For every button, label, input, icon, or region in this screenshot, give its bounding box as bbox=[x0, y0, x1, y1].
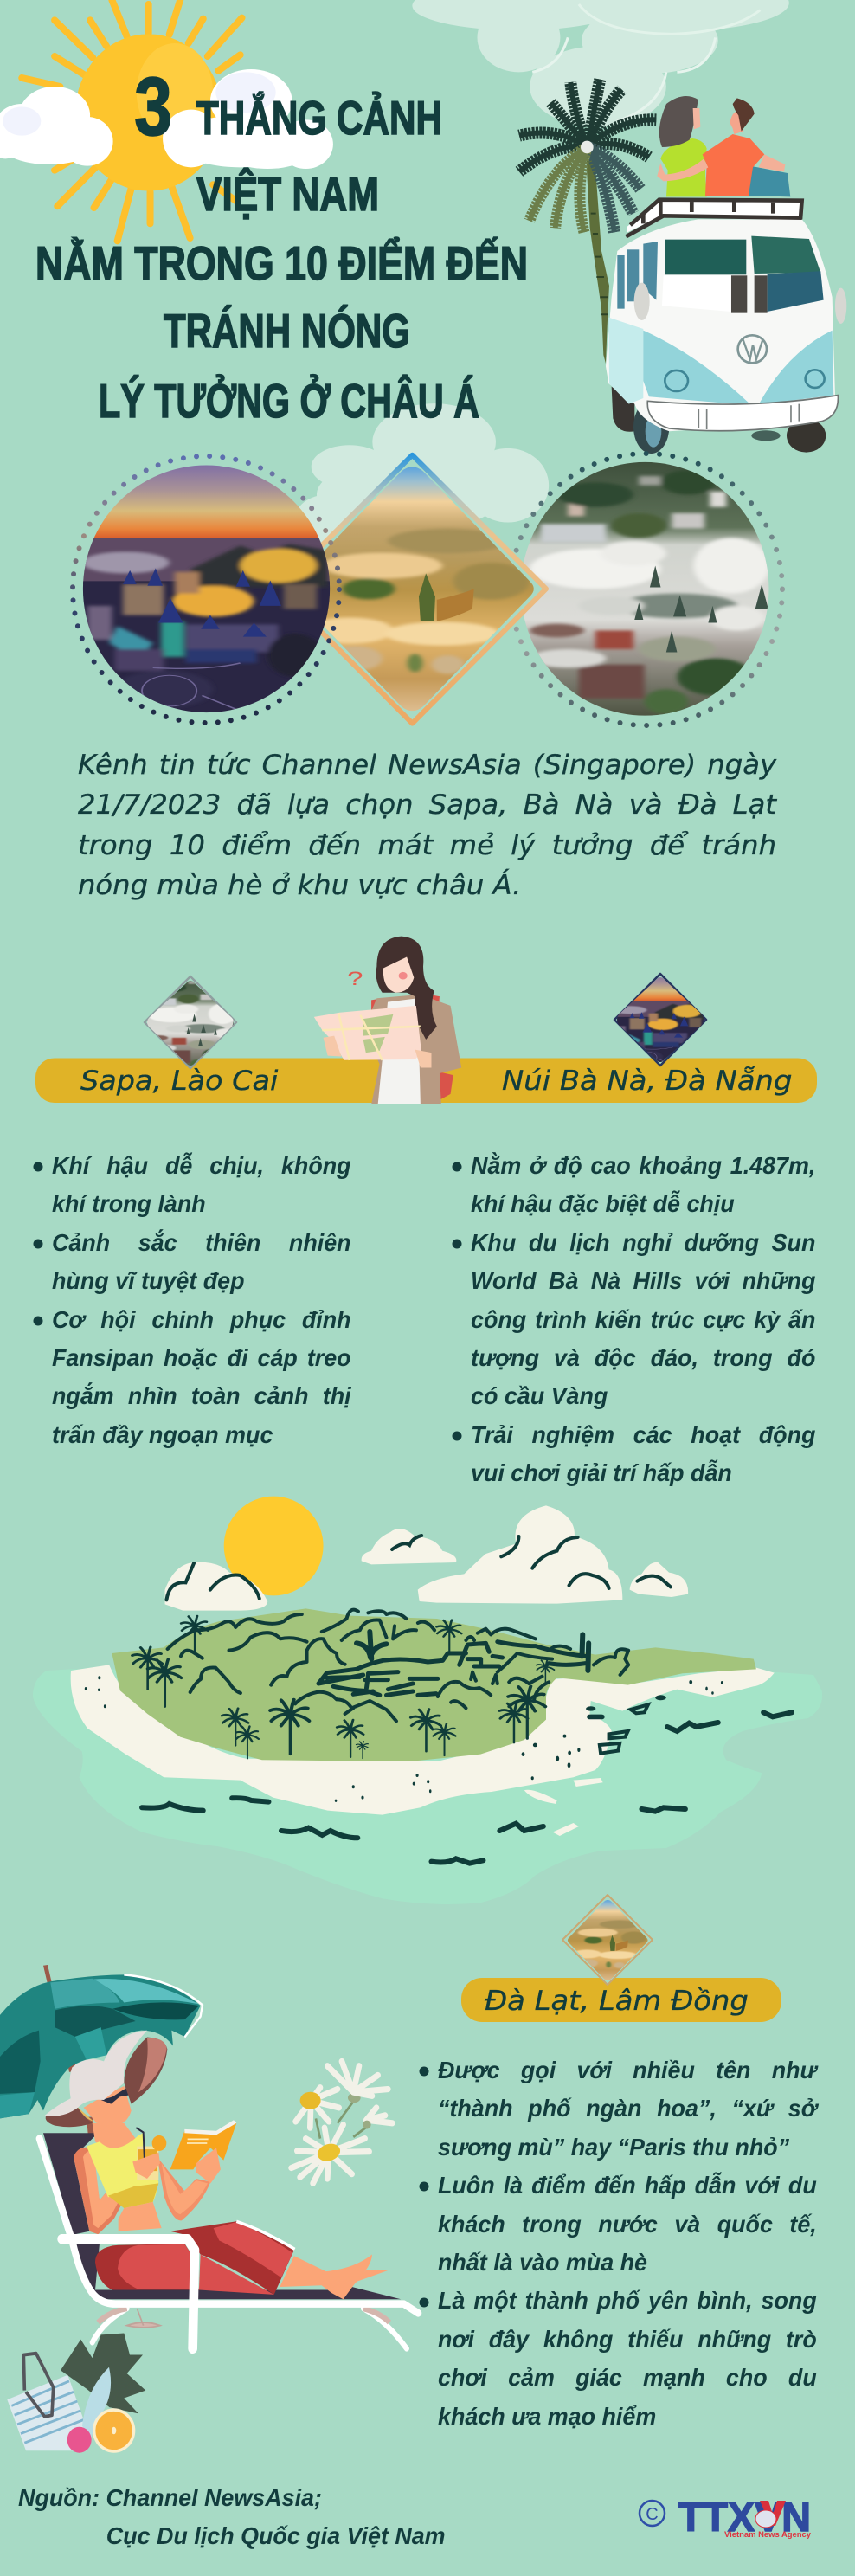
water bbox=[33, 1669, 822, 1904]
ring of dots: Ba Na bbox=[73, 456, 339, 723]
icon: sun with rays bbox=[22, 0, 242, 241]
pink flower bbox=[68, 2427, 92, 2453]
bullets: Sapa bbox=[52, 1152, 351, 1448]
source note bbox=[18, 2484, 446, 2549]
title: VIỆT NAM bbox=[196, 167, 379, 221]
heading: Ba Na: Núi Bà Nà, Đà Nẵng bbox=[502, 1066, 792, 1097]
hands bbox=[324, 1036, 431, 1067]
bullets: Da Lat bbox=[438, 2057, 819, 2430]
van wheels bbox=[612, 387, 826, 454]
map bbox=[314, 1006, 421, 1060]
bullets: Sapa: trấn đầy ngoạn mục bbox=[52, 1421, 273, 1448]
diamond frame bbox=[279, 455, 546, 724]
bullets: Sapa: Cảnh sắc thiên nhiên bbox=[52, 1229, 351, 1256]
body and limbs bbox=[74, 2123, 389, 2299]
heading: Sapa: Sapa, Lào Cai bbox=[80, 1066, 278, 1097]
lounger seat bbox=[43, 2133, 401, 2299]
ring of dots: Sapa bbox=[511, 454, 782, 725]
umbrella pole bbox=[43, 1965, 94, 2134]
tropical leaf bbox=[61, 2334, 145, 2413]
couple bbox=[657, 96, 790, 196]
bullets: Ba Na: Khu du lịch nghỉ dưỡng Sun bbox=[471, 1229, 815, 1256]
mini diamond: Sapa bbox=[144, 975, 239, 1070]
photo: Sapa bbox=[518, 460, 775, 717]
bullets: Ba Na: Trải nghiệm các hoạt động bbox=[471, 1421, 815, 1448]
illustration: island bbox=[33, 1497, 822, 1904]
bullets bbox=[33, 1162, 462, 2308]
bullets: Da Lat: Được gọi với nhiều tên như bbox=[438, 2057, 817, 2083]
logo: TTXVN: C bbox=[646, 2505, 659, 2524]
intro text: trong 10 điểm đến mát mẻ lý tưởng để tránh bbox=[78, 830, 776, 861]
mini diamond: Da Lat bbox=[562, 1895, 652, 1985]
source note: Cục Du lịch Quốc gia Việt Nam bbox=[106, 2522, 446, 2549]
title bbox=[35, 61, 528, 428]
bullets: Ba Na: có cầu Vàng bbox=[471, 1382, 608, 1409]
van body bbox=[606, 219, 838, 431]
jacket bbox=[363, 995, 461, 1104]
lounger legs bbox=[93, 2309, 407, 2348]
intro text bbox=[78, 750, 777, 901]
label band: Sapa and Ba Na bbox=[35, 1058, 817, 1103]
waves bbox=[142, 1712, 792, 1864]
sun bbox=[224, 1497, 324, 1595]
flowers bbox=[292, 2061, 392, 2183]
pale cloud: top right bbox=[412, 0, 789, 127]
bullets: Sapa: hùng vĩ tuyệt đẹp bbox=[52, 1267, 245, 1294]
green hill bbox=[112, 1608, 756, 1761]
illustration: woman reading on sun lounger bbox=[0, 1965, 418, 2453]
bullets: Ba Na: tượng và độc đáo, trong đó bbox=[471, 1344, 815, 1371]
hair bbox=[376, 937, 437, 1040]
source note: Nguồn: Channel NewsAsia; bbox=[18, 2484, 322, 2511]
bullets: Sapa: khí trong lành bbox=[52, 1190, 206, 1217]
intro text: Kênh tin tức Channel NewsAsia (Singapore) ngày bbox=[78, 750, 776, 781]
bullets: Da Lat: sương mù” hay “Paris thu nhỏ” bbox=[438, 2134, 789, 2161]
bullets: Sapa: ngắm nhìn toàn cảnh thị bbox=[52, 1382, 351, 1409]
photo: Ba Na bbox=[76, 464, 338, 714]
logo: TTXVN: TTXVN bbox=[678, 2494, 811, 2540]
mini diamond: Ba Na bbox=[613, 974, 710, 1066]
umbrella bbox=[0, 1974, 202, 2118]
surfboard bbox=[82, 2367, 111, 2438]
van bumper bbox=[647, 396, 838, 431]
backpack straps and bag bbox=[421, 1067, 453, 1104]
book bbox=[170, 2120, 236, 2183]
intro text: nóng mùa hè ở khu vực châu Á. bbox=[78, 870, 521, 901]
logo: TTXVN: Vietnam News Agency bbox=[724, 2530, 812, 2540]
bullets: Ba Na: công trình kiến trúc cực kỳ ấn bbox=[471, 1306, 815, 1333]
palm tree bbox=[519, 80, 656, 364]
illustration: couple on camper van bbox=[606, 96, 846, 454]
bullets: Sapa: Cơ hội chinh phục đỉnh bbox=[52, 1306, 351, 1333]
bullets: Da Lat: nhất là vào mùa hè bbox=[438, 2249, 647, 2276]
label band: Da Lat bbox=[461, 1978, 781, 2022]
title: THẮNG CẢNH bbox=[196, 91, 442, 145]
pale cloud behind photos bbox=[295, 403, 549, 544]
heading: Da Lat: Đà Lạt, Lâm Đồng bbox=[485, 1986, 749, 2017]
title: NẰM TRONG 10 ĐIỂM ĐẾN bbox=[35, 236, 528, 290]
lounger frame bbox=[40, 2139, 418, 2313]
stones and dots bbox=[85, 1676, 723, 1802]
bullets: Da Lat: Là một thành phố yên bình, song bbox=[438, 2287, 817, 2314]
shirt bbox=[378, 998, 421, 1104]
clouds over sun bbox=[0, 69, 333, 169]
sand bbox=[71, 1665, 775, 1815]
red trousers bbox=[95, 2221, 295, 2295]
photo: Da Lat bbox=[284, 464, 546, 717]
hat and face bbox=[45, 2031, 167, 2127]
bullets: Sapa: Khí hậu dễ chịu, không bbox=[52, 1152, 351, 1179]
bullets: Ba Na: World Bà Nà Hills với những bbox=[471, 1267, 815, 1294]
face bbox=[383, 957, 414, 993]
bullets: Da Lat: nơi đây không thiếu những trò bbox=[438, 2326, 817, 2353]
bullets: Da Lat: khách ưa mạo hiểm bbox=[438, 2403, 656, 2430]
bullets: Da Lat: khách trong nước và quốc tế, bbox=[438, 2211, 817, 2238]
bullets: Da Lat: Luôn là điểm đến hấp dẫn với du bbox=[438, 2172, 817, 2199]
drink bbox=[132, 2128, 166, 2180]
VW logo and headlights bbox=[665, 335, 825, 391]
intro text: 21/7/2023 đã lựa chọn Sapa, Bà Nà và Đà Lạt bbox=[78, 789, 776, 821]
bullets: Ba Na: Nằm ở độ cao khoảng 1.487m, bbox=[471, 1152, 815, 1179]
island vegetation bbox=[132, 1610, 628, 1759]
orange slice bbox=[93, 2408, 135, 2453]
bullets: Da Lat: “thành phố ngàn hoa”, “xứ sở bbox=[438, 2095, 817, 2122]
bullets: Ba Na bbox=[471, 1152, 815, 1486]
question mark: ? bbox=[347, 968, 363, 989]
bullets: Sapa: Fansipan hoặc đi cáp treo bbox=[52, 1344, 351, 1371]
title: 3 bbox=[134, 61, 172, 153]
title: LÝ TƯỞNG Ở CHÂU Á bbox=[99, 374, 479, 428]
illustration: girl with map bbox=[314, 937, 461, 1104]
clouds bbox=[165, 1505, 688, 1611]
bullets: Ba Na: khí hậu đặc biệt dễ chịu bbox=[471, 1190, 735, 1217]
bullets: Da Lat: chơi cảm giác mạnh cho du bbox=[438, 2364, 817, 2391]
van windows bbox=[617, 236, 846, 324]
roof rack bbox=[626, 200, 802, 236]
beach bag bbox=[7, 2354, 87, 2450]
title: TRÁNH NÓNG bbox=[164, 304, 410, 357]
bullets: Ba Na: vui chơi giải trí hấp dẫn bbox=[471, 1459, 732, 1486]
